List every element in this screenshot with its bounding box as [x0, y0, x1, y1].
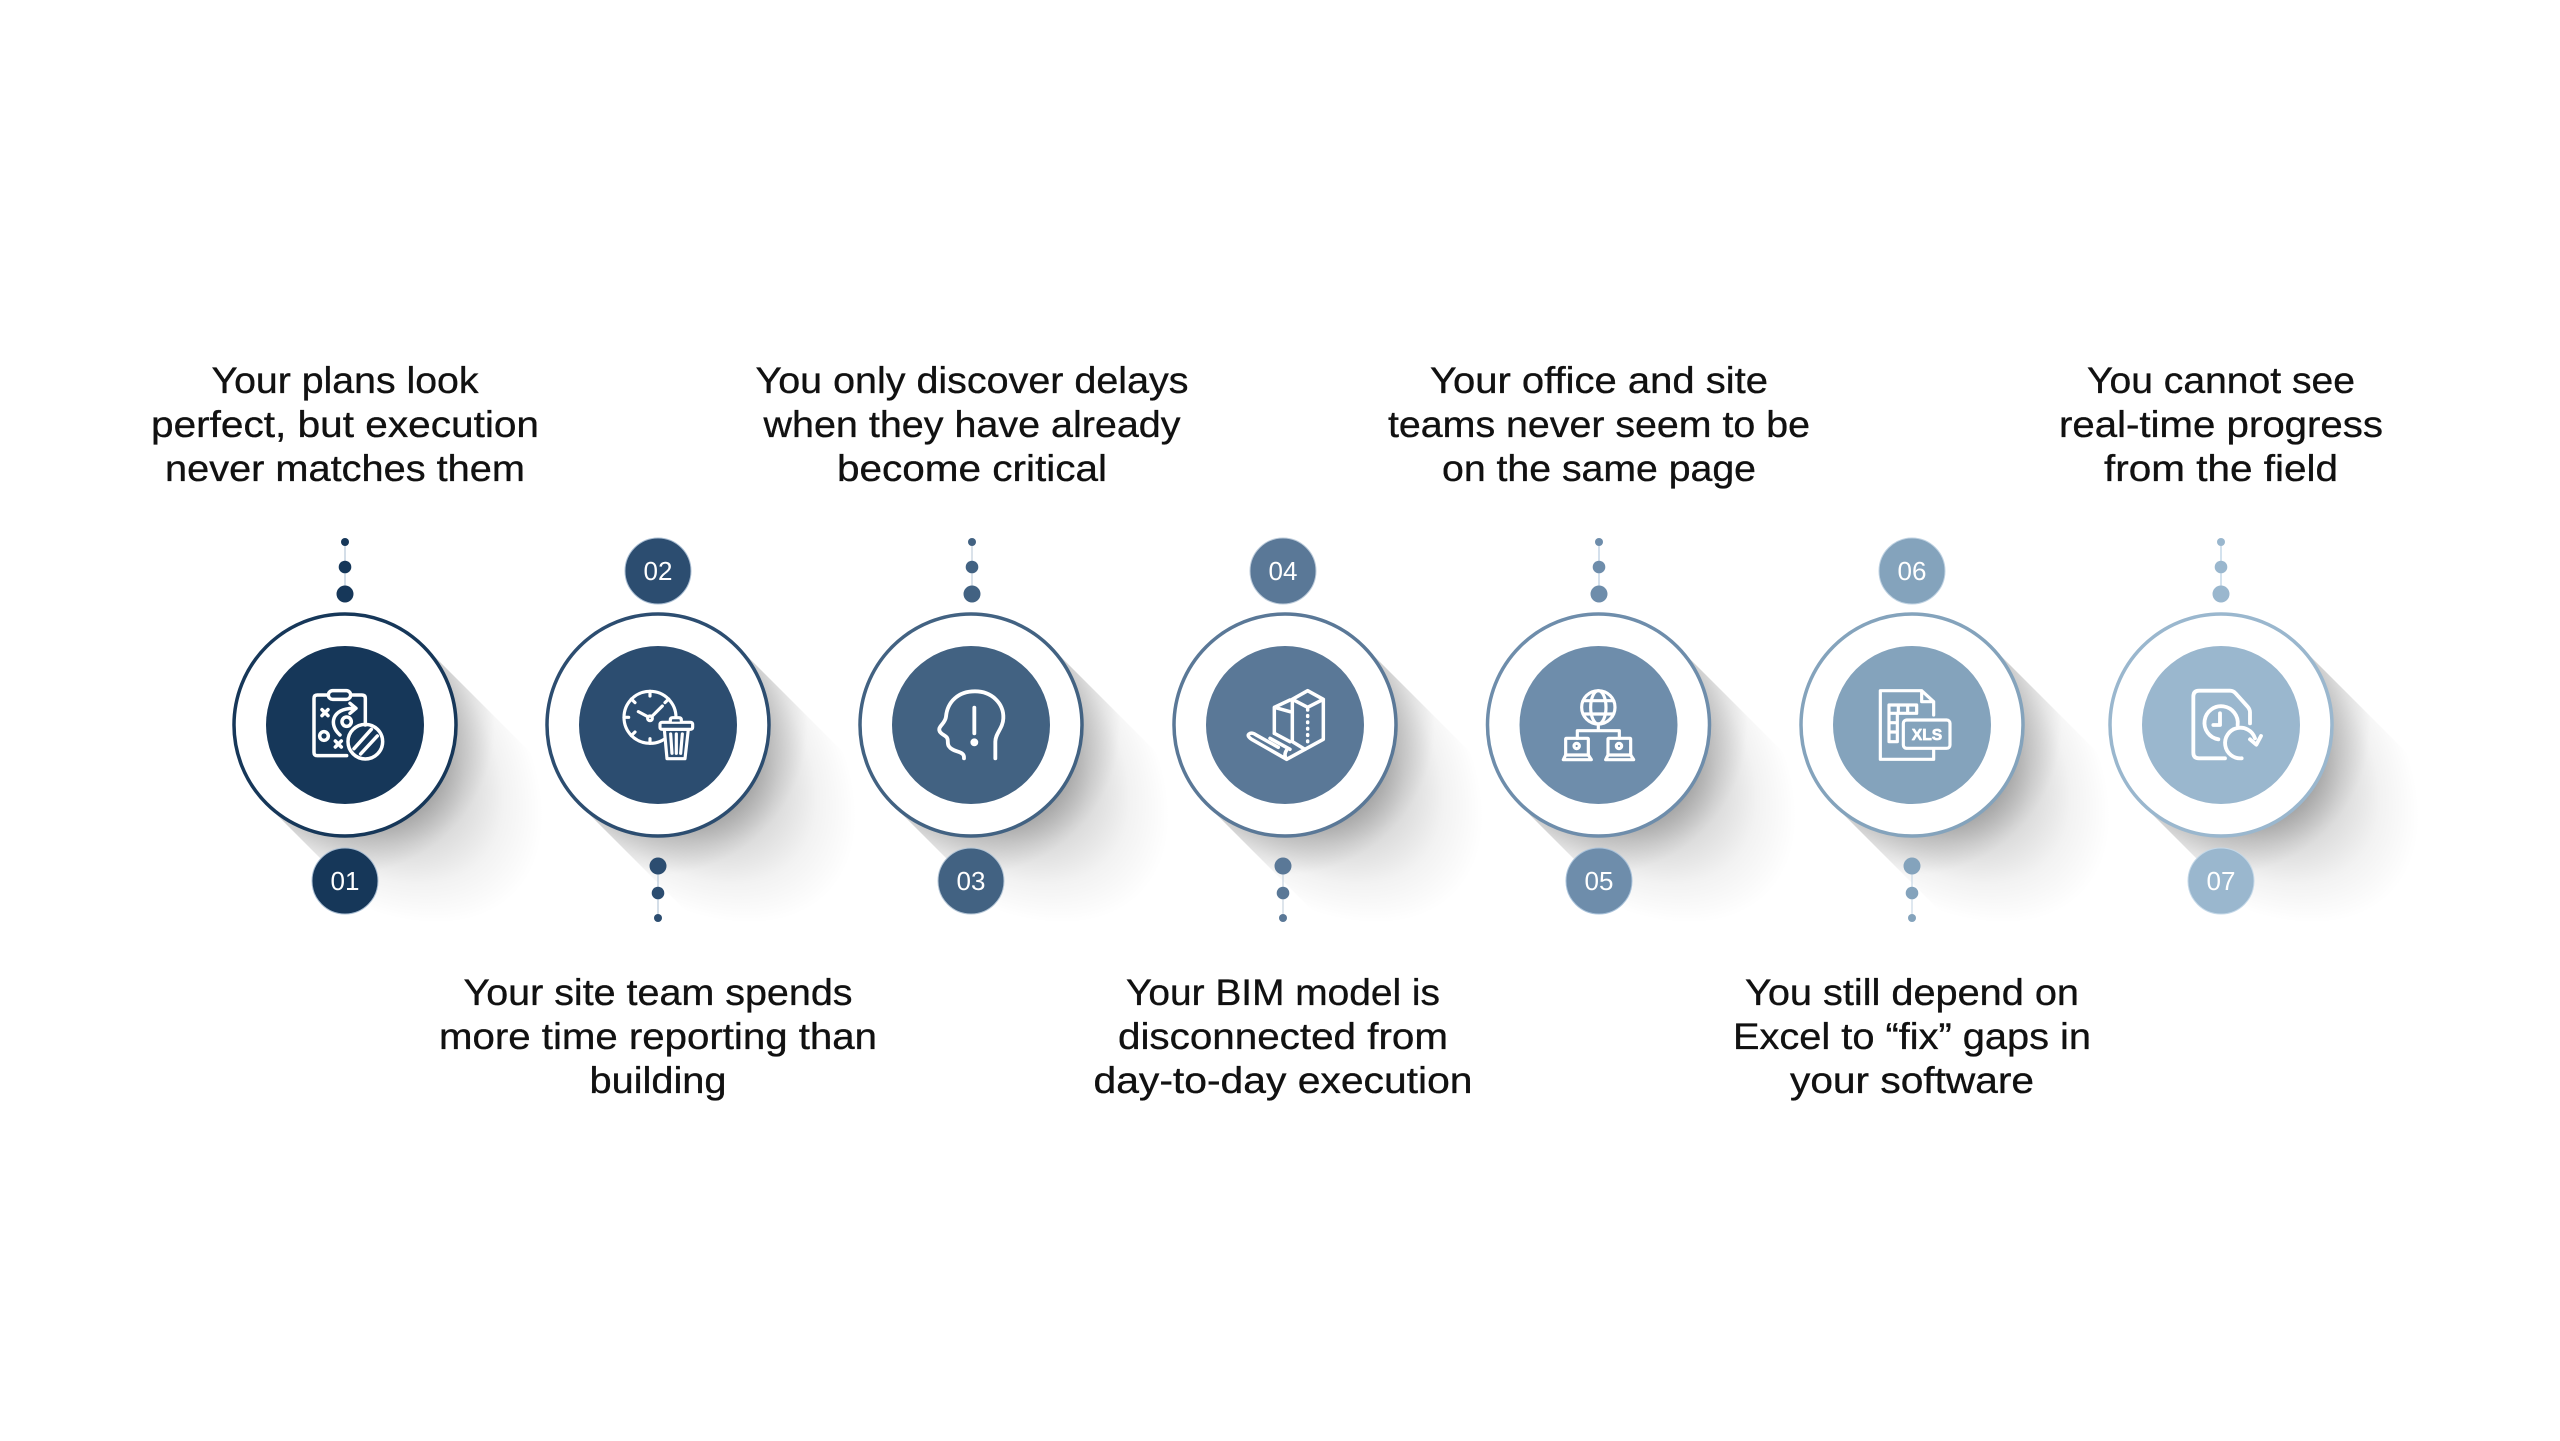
- disc 04: [1206, 646, 1364, 804]
- badge 03: [938, 848, 1004, 914]
- ring 06: [1801, 614, 2023, 836]
- connector dots 03: [964, 538, 980, 602]
- text 01: never matches them: [165, 448, 525, 489]
- icon: globe network with laptops: [1563, 691, 1634, 760]
- text 07: You cannot see: [2087, 360, 2355, 401]
- ring 07: [2110, 614, 2332, 836]
- text 02: Your site team spends: [464, 972, 852, 1013]
- text 02: [439, 972, 877, 1101]
- icon: head with exclamation mark: [939, 691, 1003, 758]
- shadow 05: [1519, 646, 1889, 1016]
- badge 01: 01: [331, 866, 359, 896]
- shadow 02: [579, 646, 949, 1016]
- badge 04: [1250, 538, 1316, 604]
- badge 04: 04: [1269, 556, 1297, 586]
- ring 02: [547, 614, 769, 836]
- badge 07: 07: [2207, 866, 2235, 896]
- badge 02: 02: [644, 556, 672, 586]
- connector dots 06: [1904, 858, 1920, 922]
- text 03: You only discover delays: [756, 360, 1188, 401]
- text 06: [1733, 972, 2091, 1101]
- badge 05: 05: [1585, 866, 1613, 896]
- badge 07: [2188, 848, 2254, 914]
- disc 05: [1520, 646, 1678, 804]
- badge 06: [1879, 538, 1945, 604]
- step 06: [1801, 538, 2203, 1016]
- shadow 06: [1833, 646, 2203, 1016]
- ring 04: [1174, 614, 1396, 836]
- disc 06: [1833, 646, 1991, 804]
- shadow 03: [892, 646, 1262, 1016]
- shadow 07: [2142, 646, 2512, 1016]
- text 02: building: [590, 1060, 726, 1101]
- connector dots 05: [1590, 538, 1608, 602]
- text 05: on the same page: [1442, 448, 1756, 489]
- text 06: your software: [1790, 1060, 2034, 1101]
- text 06: Excel to “fix” gaps in: [1733, 1016, 2091, 1057]
- icon: clock and trash can: [624, 691, 693, 759]
- connector dots 02: [650, 858, 666, 922]
- connector dots 01: [336, 538, 354, 602]
- text 05: teams never seem to be: [1388, 404, 1810, 445]
- text 06: You still depend on: [1745, 972, 2079, 1013]
- ring 05: [1488, 614, 1710, 836]
- step 05: [1488, 538, 1889, 1016]
- badge 03: 03: [957, 866, 985, 896]
- shadow 04: [1206, 646, 1576, 1016]
- icon: clipboard with prohibited sign: [314, 691, 383, 759]
- icon: document with clock and refresh arrow: [2193, 691, 2261, 758]
- badge 06: 06: [1898, 556, 1926, 586]
- text 04: [1094, 972, 1472, 1101]
- text 04: Your BIM model is: [1126, 972, 1440, 1013]
- shadow 01: [266, 646, 636, 1016]
- icon: XLS spreadsheet file: XLS: [1912, 727, 1942, 744]
- icon: building model on blueprint roll: [1248, 691, 1323, 759]
- text 01: [151, 360, 539, 489]
- text 04: disconnected from: [1118, 1016, 1448, 1057]
- text 01: perfect, but execution: [151, 404, 539, 445]
- badge 01: [312, 848, 378, 914]
- connector dots 07: [2212, 538, 2230, 602]
- step 01: [234, 538, 636, 1016]
- badge 02: [625, 538, 691, 604]
- text 03: become critical: [837, 448, 1107, 489]
- step 03: [860, 538, 1262, 1016]
- badge 05: [1566, 848, 1632, 914]
- icon: XLS spreadsheet file: [1880, 691, 1950, 759]
- disc 02: [579, 646, 737, 804]
- connector dots 04: [1274, 858, 1292, 922]
- text 07: from the field: [2104, 448, 2338, 489]
- ring 01: [234, 614, 456, 836]
- disc 03: [892, 646, 1050, 804]
- step 02: [547, 538, 949, 1016]
- step 07: [2110, 538, 2512, 1016]
- text 01: Your plans look: [212, 360, 479, 401]
- text 05: [1388, 360, 1810, 489]
- text 03: [756, 360, 1188, 489]
- text 04: day-to-day execution: [1094, 1060, 1472, 1101]
- text 07: real-time progress: [2059, 404, 2383, 445]
- text 05: Your office and site: [1430, 360, 1768, 401]
- ring 03: [860, 614, 1082, 836]
- disc 01: [266, 646, 424, 804]
- disc 07: [2142, 646, 2300, 804]
- text 07: [2059, 360, 2383, 489]
- text 02: more time reporting than: [439, 1016, 877, 1057]
- text 03: when they have already: [762, 404, 1181, 445]
- step 04: [1174, 538, 1576, 1016]
